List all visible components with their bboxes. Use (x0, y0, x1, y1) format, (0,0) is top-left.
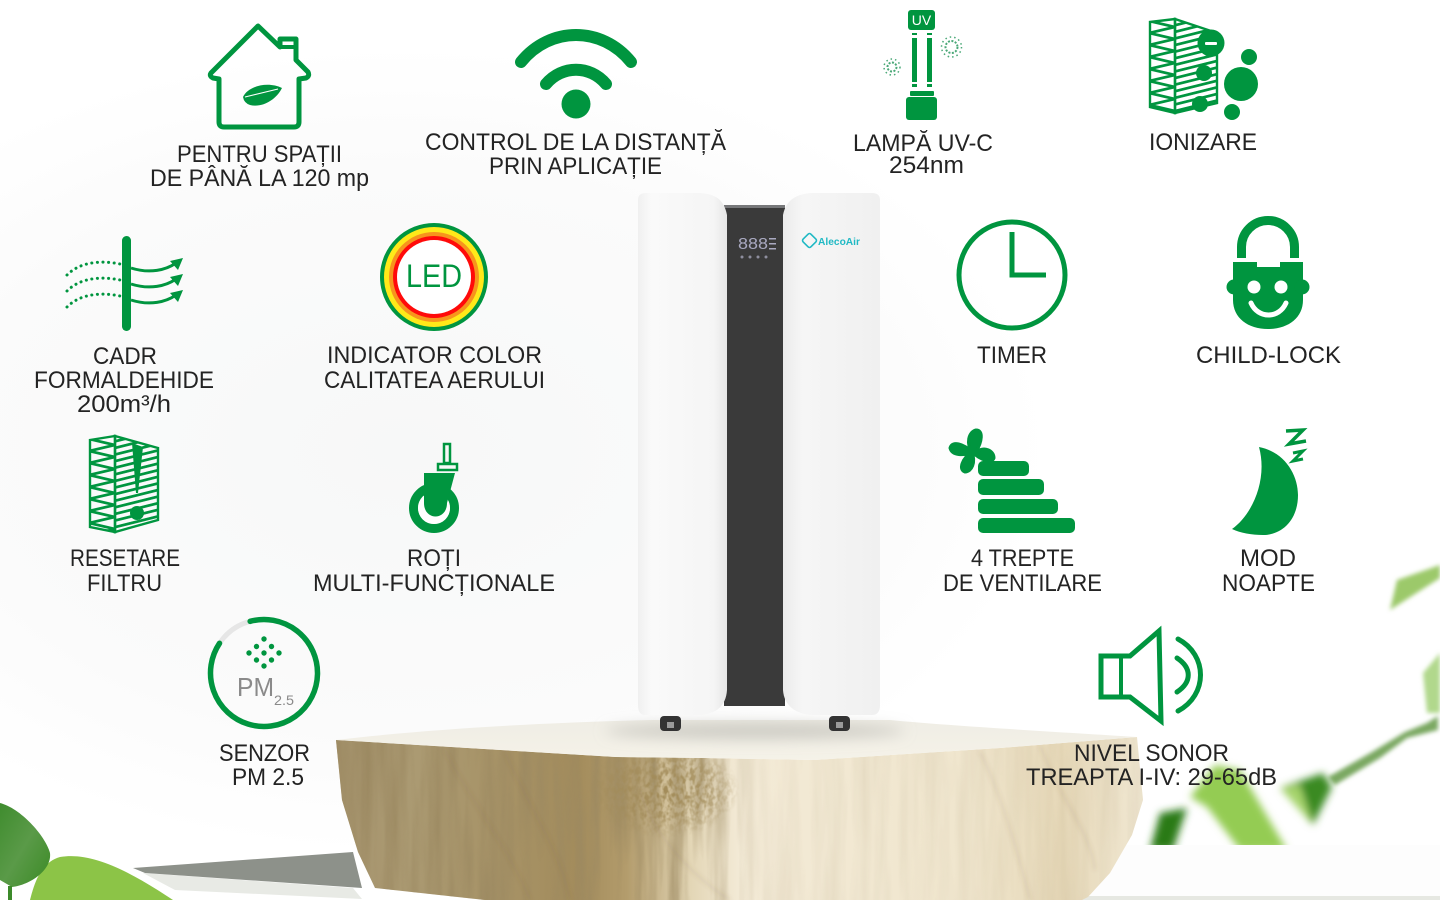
label (1222, 545, 1315, 597)
icon: clock (959, 222, 1065, 328)
icon: caster wheel (414, 444, 457, 528)
label: SENZOR (219, 740, 310, 767)
icon: filter with exclamation (90, 436, 158, 532)
label (943, 545, 1102, 597)
label (219, 740, 310, 791)
icon: LED ring: LED (406, 258, 462, 294)
label: PM 2.5 (232, 764, 304, 791)
icon: house (210, 26, 309, 127)
label (324, 342, 545, 394)
stem (8, 886, 12, 900)
label (150, 141, 369, 192)
label (313, 545, 555, 597)
feature: CADR (34, 236, 214, 418)
icon: wifi (521, 35, 631, 118)
icon: PM2.5 gauge: PM (237, 672, 274, 702)
label: CHILD-LOCK (1196, 342, 1341, 369)
label: PENTRU SPAȚII (177, 141, 342, 168)
display (738, 236, 776, 258)
feature: ventilation (943, 430, 1102, 597)
label (1026, 740, 1277, 791)
feature: filter reset (70, 436, 180, 597)
label: DE PÂNĂ LA 120 mp (150, 165, 369, 192)
label: 254nm (889, 152, 964, 179)
right panel (783, 193, 880, 715)
feature: child lock (1196, 220, 1341, 369)
purifier (638, 193, 880, 731)
feature: night mode (1222, 430, 1315, 597)
logo: AlecoAir (818, 236, 860, 248)
label: PRIN APLICAȚIE (489, 153, 662, 180)
logo (802, 233, 860, 248)
plant: bottom left (0, 803, 173, 900)
blurred plant: right (1150, 565, 1440, 850)
label: LAMPĂ UV-C (853, 130, 993, 157)
label: CONTROL DE LA DISTANȚĂ (425, 129, 726, 156)
feature: LED indicator (324, 225, 545, 394)
feature: timer (959, 222, 1065, 369)
label: ROȚI (407, 545, 461, 572)
label (34, 343, 214, 418)
label: CADR (93, 343, 157, 370)
icon: UV lamp (884, 10, 962, 120)
label: INDICATOR COLOR (327, 342, 542, 369)
label (70, 545, 180, 597)
wood top surface (336, 720, 1137, 760)
label: MOD (1240, 545, 1296, 572)
icon: smiling lock (1226, 220, 1310, 329)
tabletop background (133, 845, 1440, 900)
label: FILTRU (87, 570, 162, 597)
central dark panel (724, 205, 785, 706)
dark leaf (0, 803, 50, 887)
wood grain (336, 740, 1138, 900)
feature: UV lamp (853, 10, 993, 179)
icon: moon (1232, 430, 1306, 535)
icon: UV lamp: UV (912, 12, 932, 28)
icon: fan and bars (950, 430, 1075, 533)
light leaf (30, 856, 173, 900)
label: TIMER (977, 342, 1047, 369)
label: FORMALDEHIDE (34, 367, 214, 394)
display: 888 (738, 236, 768, 253)
left panel (638, 193, 727, 715)
label: NOAPTE (1222, 570, 1315, 597)
label: MULTI-FUNCȚIONALE (313, 570, 555, 597)
wooden block (336, 720, 1146, 900)
feature: noise level (1026, 631, 1277, 791)
label: NIVEL SONOR (1074, 740, 1229, 767)
shadow under purifier (605, 723, 905, 739)
feature: ionizer (1149, 19, 1258, 156)
icon: ionizer (1150, 19, 1258, 120)
label: CALITATEA AERULUI (324, 367, 545, 394)
icon: airflow (67, 236, 183, 331)
label: IONIZARE (1149, 129, 1257, 156)
label: 200m³/h (77, 391, 171, 418)
icon: LED ring (382, 225, 486, 329)
feature: remote control (425, 35, 726, 180)
label: RESETARE (70, 545, 180, 572)
icon: PM2.5 gauge: 2.5 (274, 692, 294, 708)
icon: speaker (1101, 631, 1200, 721)
feature: wheels (313, 444, 555, 597)
label: TREAPTA I-IV: 29-65dB (1026, 764, 1277, 791)
feature: PM sensor (211, 619, 318, 791)
label: DE VENTILARE (943, 570, 1102, 597)
wheels (660, 716, 850, 731)
feature: room size (150, 26, 369, 192)
label (425, 129, 726, 180)
icon: PM2.5 gauge (211, 619, 318, 726)
label: 4 TREPTE (971, 545, 1074, 572)
wood side (336, 737, 1143, 900)
label (853, 130, 993, 179)
